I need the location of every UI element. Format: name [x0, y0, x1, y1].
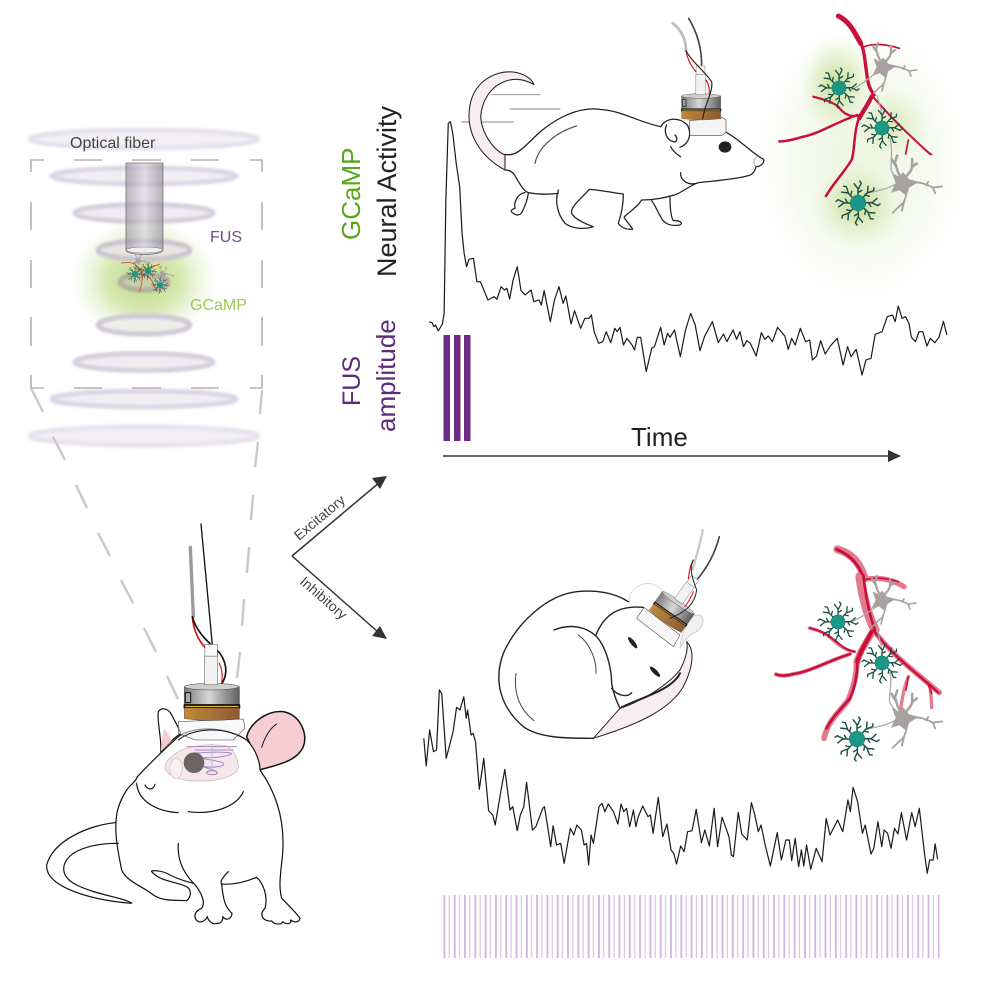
collar — [637, 607, 680, 647]
panel: FUS focal stack — [30, 130, 262, 445]
astrocyte — [818, 602, 858, 642]
collar — [178, 719, 245, 740]
processes linking cells — [850, 606, 900, 730]
dashed zoom box — [31, 160, 262, 388]
astrocyte — [819, 68, 859, 108]
brain with fiber spot — [165, 744, 238, 781]
tail — [47, 823, 132, 903]
label: FUS: FUS — [210, 229, 242, 246]
neuron — [892, 155, 942, 213]
eyes — [627, 636, 639, 650]
label: Inhibitory: Inhibitory — [297, 573, 350, 623]
speed lines — [462, 95, 560, 122]
blood vessel, dilated — [776, 549, 939, 738]
left ear — [158, 709, 181, 752]
astrocyte — [835, 717, 879, 761]
axis labels — [336, 105, 402, 432]
neural network, top — [819, 43, 942, 225]
eye — [719, 141, 731, 153]
neuron — [873, 43, 917, 93]
illustration: running mouse — [462, 18, 764, 229]
label: Optical fiber: Optical fiber — [70, 135, 156, 152]
label: Neural Activity: Neural Activity — [372, 105, 402, 277]
label: GCaMP: GCaMP — [336, 148, 366, 240]
front ear — [680, 615, 703, 648]
tail — [469, 72, 534, 170]
FUS pulses, excitatory — [444, 335, 470, 441]
arrowhead: inhibitory — [372, 626, 387, 639]
cables — [190, 547, 193, 617]
optical fiber — [126, 163, 163, 254]
body — [505, 109, 764, 229]
right ear — [247, 712, 305, 770]
astrocyte — [836, 181, 880, 225]
time axis — [443, 422, 901, 462]
cables — [673, 23, 686, 51]
back ear — [629, 583, 663, 603]
label: GCaMP: GCaMP — [190, 297, 247, 314]
dashed cone lines — [31, 388, 262, 699]
blood vessel, top — [779, 16, 932, 196]
illustration: sleeping mouse — [499, 530, 719, 738]
label: FUS: FUS — [338, 356, 366, 406]
label: Time: Time — [631, 422, 688, 452]
mini neural network — [121, 253, 175, 293]
FUS transducer — [649, 567, 711, 634]
face details — [137, 783, 243, 813]
body — [499, 591, 628, 738]
illustration: mouse with implant, sitting — [47, 524, 305, 924]
neuron — [872, 576, 916, 626]
head and haunch lines — [554, 607, 643, 708]
neural network, inhibitory — [818, 576, 942, 761]
neuron — [892, 690, 942, 748]
vessel core — [776, 549, 938, 728]
trace: GCaMP response, excitatory — [429, 122, 947, 375]
branching arrows — [291, 476, 387, 639]
astrocyte — [862, 643, 902, 683]
astrocyte — [862, 108, 902, 148]
arrowhead: excitatory — [372, 476, 387, 489]
label: Excitatory: Excitatory — [291, 492, 348, 543]
green GCaMP glow — [70, 218, 218, 342]
FUS pulses, inhibitory — [444, 895, 940, 958]
green glow behind top network — [756, 18, 968, 302]
collar — [689, 117, 726, 135]
head and body outline — [137, 729, 300, 924]
hind foot — [511, 193, 528, 215]
processes linking cells — [851, 72, 900, 194]
nose — [754, 156, 758, 167]
cables — [693, 530, 703, 570]
vessel halo — [776, 549, 939, 738]
ear — [661, 119, 690, 157]
tail — [593, 642, 692, 738]
haunch line — [535, 126, 577, 163]
label: amplitude: amplitude — [371, 319, 401, 432]
FUS transducer — [184, 644, 239, 721]
arrow — [443, 450, 901, 462]
trace: GCaMP response, inhibitory — [424, 690, 938, 873]
FUS pressure rings — [30, 130, 258, 445]
FUS transducer — [682, 66, 721, 120]
